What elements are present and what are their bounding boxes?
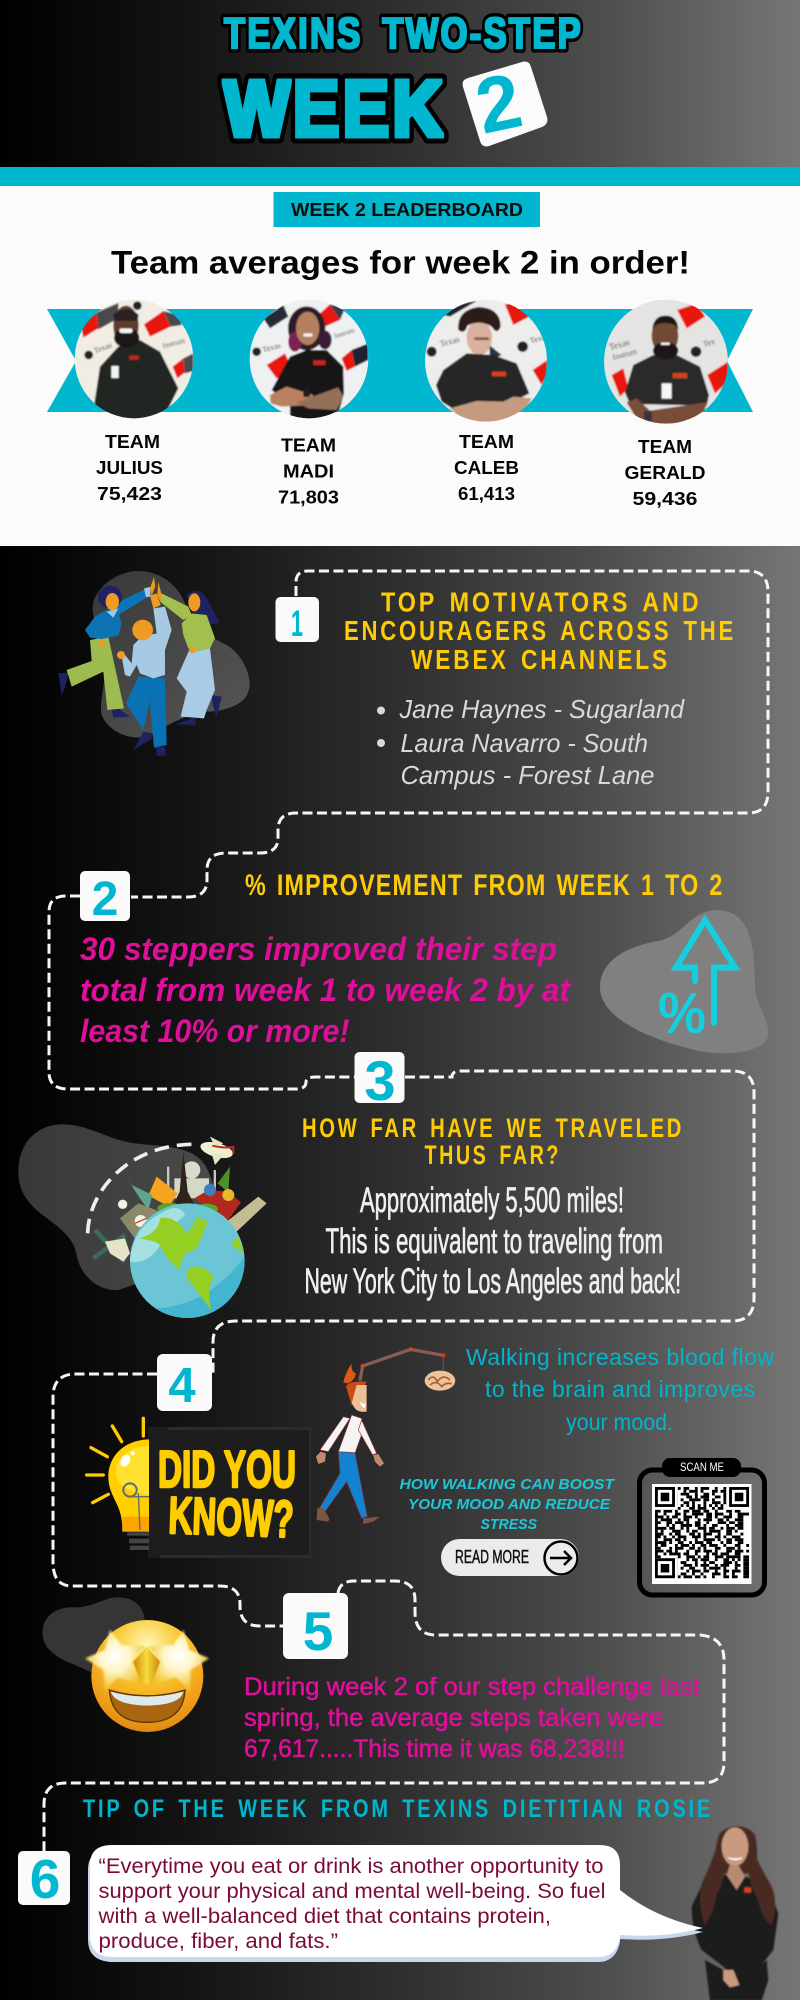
section 3: distance travelled: [18, 1049, 684, 1322]
number badge 1: 1: [291, 603, 303, 644]
team Caleb label: [454, 431, 519, 504]
photo: team Caleb leader: Texas: [439, 334, 461, 349]
comparison text: [244, 1673, 700, 1763]
photo: team Gerald leader: Instrum: [612, 347, 639, 362]
did you know panel: [148, 1427, 311, 1558]
motivators list: Laura Navarro - South: [400, 728, 648, 758]
distance text: Approximately 5,500 miles!: [360, 1181, 624, 1220]
photo: team Caleb leader: [425, 300, 547, 422]
team Gerald label: [624, 436, 706, 509]
team Julius label: 75,423: [97, 483, 162, 504]
team Caleb label: 61,413: [458, 483, 515, 504]
dietitian quote: support your physical and mental well-being. So fuel: [98, 1880, 606, 1903]
photo: team Gerald leader: Tex: [702, 337, 716, 349]
leaderboard tag: WEEK 2 LEADERBOARD: [291, 200, 523, 220]
heading: top motivators: [344, 586, 736, 675]
QR code: [640, 1458, 764, 1595]
comparison text: spring, the average steps taken were: [244, 1704, 663, 1732]
improvement statement: total from week 1 to week 2 by at: [80, 972, 571, 1008]
icon: light bulb: [87, 1418, 149, 1550]
section 4: did you know: [87, 1344, 774, 1595]
panel background: [0, 186, 800, 546]
teal ribbon: [47, 309, 753, 412]
team Madi label: TEAM: [281, 434, 336, 456]
heading: top motivators: TOP MOTIVATORS AND: [381, 586, 702, 618]
photo: team Madi leader: Instrum: [333, 327, 356, 340]
dashed connector path: [44, 571, 768, 1851]
panel: leaderboard: [0, 186, 800, 546]
article title: YOUR MOOD AND REDUCE: [408, 1497, 611, 1513]
distance text: [304, 1181, 681, 1301]
teal band: [0, 167, 800, 186]
did you know text: [158, 1441, 296, 1549]
photo: team Julius leader: Texas: [93, 340, 113, 355]
number badge 3: 3: [364, 1049, 396, 1112]
number badge 5: 5: [303, 1600, 333, 1662]
header background: [0, 0, 800, 167]
dietitian quote: produce, fiber, and fats.”: [98, 1930, 338, 1953]
number badge 6: 6: [30, 1848, 60, 1910]
section 2: percent improvement: [80, 869, 768, 1053]
illustration: high five team: [58, 571, 250, 756]
heading: how far: THUS FAR?: [424, 1140, 561, 1170]
number badge 4: [157, 1354, 212, 1413]
section 6: dietitian tip: [18, 1795, 778, 2000]
illustration: walking man with brain: [316, 1347, 455, 1524]
scan me tag: SCAN ME: [680, 1460, 724, 1474]
icon: percent up arrow: %: [658, 981, 706, 1046]
photo: team Julius leader: [74, 300, 194, 418]
motivators list: Campus - Forest Lane: [400, 760, 654, 790]
title: Week: WEEK: [224, 64, 446, 153]
walking fact text: to the brain and improves: [485, 1376, 755, 1402]
leaderboard tag: [274, 192, 540, 227]
team Caleb label: CALEB: [454, 457, 519, 478]
number badge 2: 2: [92, 873, 118, 926]
number badge 2: [80, 871, 130, 926]
speech bubble: [88, 1845, 703, 1962]
photo: team Madi leader: [250, 300, 368, 418]
heading: top motivators: WEBEX CHANNELS: [411, 644, 670, 675]
team Madi label: MADI: [283, 460, 334, 482]
comparison text: During week 2 of our step challenge last: [244, 1673, 700, 1701]
improvement statement: 30 steppers improved their step: [80, 931, 557, 967]
photo: team Gerald leader: Texas: [608, 337, 631, 352]
motivators list: [377, 694, 685, 790]
team Madi label: 71,803: [278, 486, 339, 508]
leaderboard heading: Team averages for week 2 in order!: [111, 244, 690, 280]
team Gerald label: 59,436: [632, 488, 698, 509]
read more button: READ MORE: [455, 1547, 529, 1567]
heading: how far: HOW FAR HAVE WE TRAVELED: [302, 1113, 684, 1143]
team Caleb label: TEAM: [459, 431, 514, 452]
read more button: [441, 1539, 579, 1576]
team Julius label: [96, 431, 163, 504]
walking fact text: [466, 1344, 774, 1435]
walking fact text: your mood.: [566, 1409, 673, 1435]
photo: team Caleb leader: Texa: [529, 332, 546, 345]
photo: team Gerald leader: [603, 298, 730, 425]
team Julius label: JULIUS: [96, 457, 163, 478]
section 1: top motivators: [58, 571, 736, 790]
photo: team Julius leader: Instrum: [162, 336, 186, 350]
team Julius label: TEAM: [105, 431, 160, 452]
did you know text: DID YOU: [158, 1441, 296, 1499]
article title: STRESS: [480, 1517, 537, 1533]
week number card: 2: [468, 56, 529, 151]
section 5: last spring comparison: [43, 1593, 700, 1763]
lower dark background: [0, 546, 800, 2000]
photo: dietitian Rosie: [692, 1826, 778, 2000]
team Madi label: [278, 434, 339, 508]
number badge 4: 4: [168, 1359, 196, 1413]
article title: [400, 1477, 615, 1533]
walking fact text: Walking increases blood flow: [466, 1344, 774, 1370]
did you know text: KNOW?: [168, 1487, 295, 1549]
title block: [224, 9, 583, 153]
dietitian quote: “Everytime you eat or drink is another opportunity to: [98, 1855, 604, 1878]
dietitian quote: [97, 1855, 605, 1953]
icon: percent up arrow: [600, 910, 768, 1053]
improvement statement: least 10% or more!: [80, 1013, 350, 1049]
number badge 1: [276, 597, 319, 644]
number badge 3: [354, 1049, 404, 1112]
number badge 5: [283, 1593, 348, 1662]
motivators list: Jane Haynes - Sugarland: [399, 694, 685, 724]
number badge 6: [18, 1848, 70, 1910]
illustration: globe and landmarks: [18, 1124, 267, 1322]
comparison text: 67,617.....This time it was 68,238!!!: [244, 1735, 625, 1763]
dietitian quote: with a well-balanced diet that contains protein,: [97, 1905, 551, 1928]
icon: star-struck emoji: [43, 1597, 209, 1732]
heading: how far: [302, 1113, 684, 1170]
photo: team Madi leader: Texas: [262, 341, 282, 354]
team Gerald label: GERALD: [624, 462, 706, 483]
article title: HOW WALKING CAN BOOST: [400, 1477, 615, 1493]
team Gerald label: TEAM: [638, 436, 692, 457]
improvement statement: [80, 931, 571, 1049]
title: Texins Two-Step: TEXINS TWO-STEP: [224, 9, 583, 58]
